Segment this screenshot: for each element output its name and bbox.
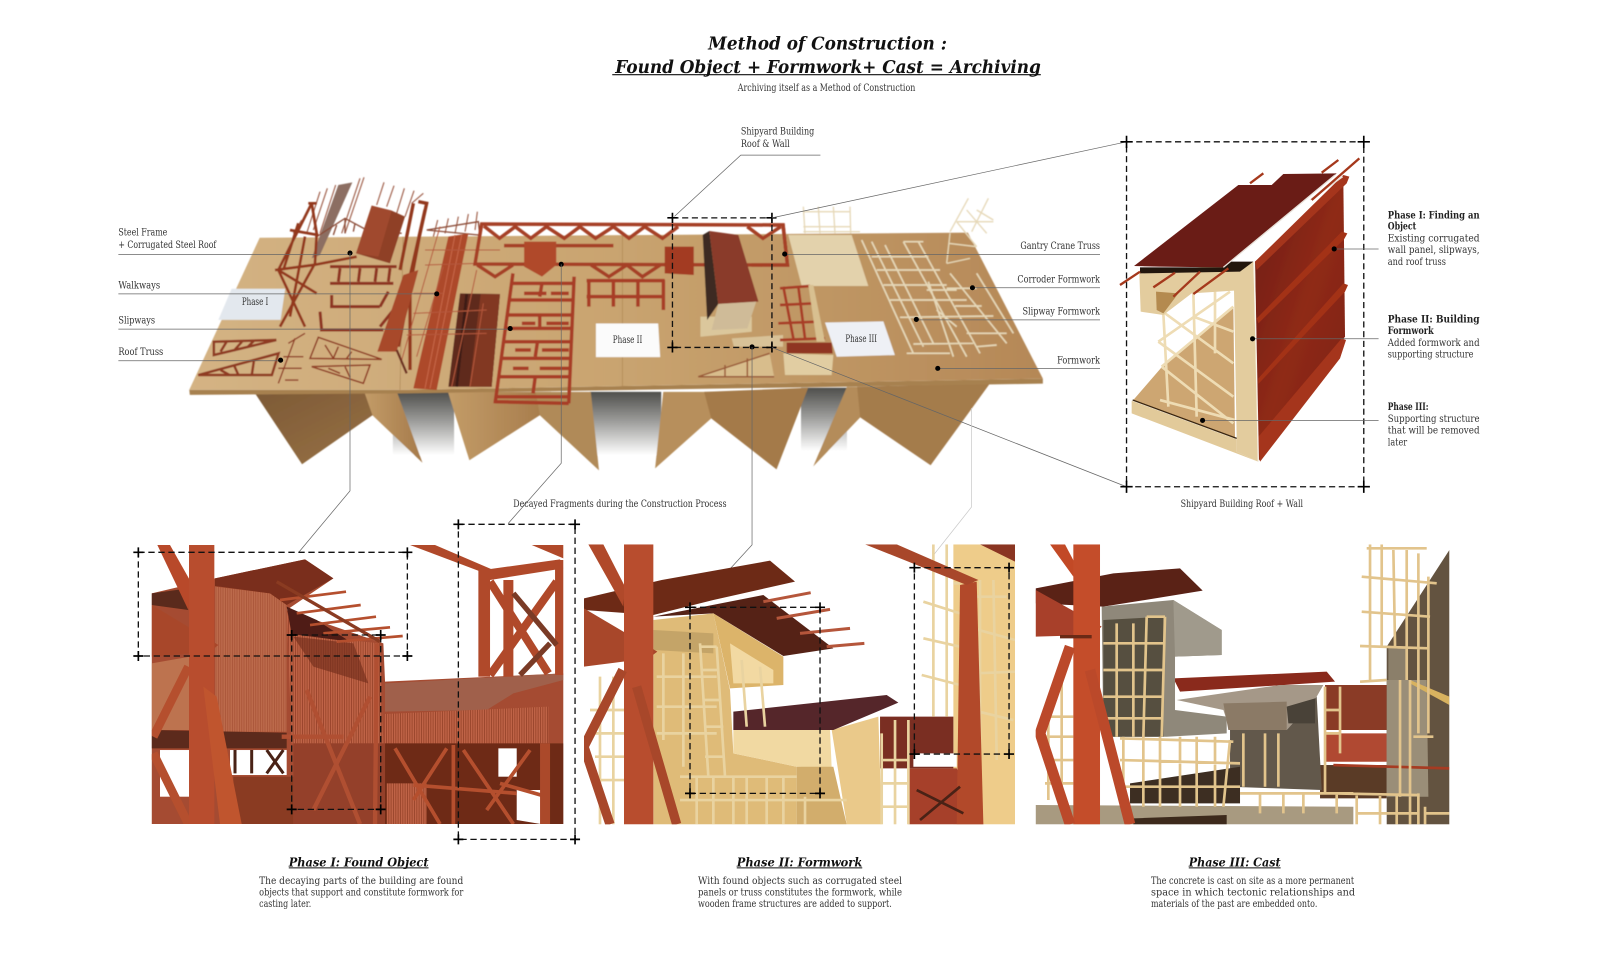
caption: shipyard building roof + wall: Shipyard Building Roof + Wall (1181, 499, 1303, 510)
table legs (254, 384, 990, 470)
gantry end (752, 225, 788, 265)
left roof truss (198, 340, 279, 375)
dashed marks over photo II (690, 568, 1009, 793)
dashed marks over photo I (138, 524, 575, 839)
label: corroder formwork (970, 275, 1101, 290)
phase card labels: Phase III (845, 334, 877, 345)
red roof panel (356, 206, 405, 263)
thin spikes (293, 177, 477, 237)
phase card labels: Phase II (613, 335, 642, 346)
slipway ladder (495, 273, 574, 403)
small left roof (152, 605, 218, 657)
pale base panel (788, 235, 868, 286)
timber lattice (1158, 292, 1235, 423)
caption: phase I: The decaying parts of the building are found (259, 876, 464, 887)
phase cards (218, 289, 895, 357)
caption: phase II: Phase II: Formwork (736, 855, 862, 869)
phase card labels: Phase I (242, 297, 268, 308)
grey corrugated roof panel (312, 182, 352, 258)
caption: phase I: casting later. (259, 899, 311, 910)
label: steel frame: Steel Frame (118, 228, 167, 239)
label: slipway formwork: Slipway Formwork (1022, 306, 1101, 317)
photo: phase III cast (1036, 544, 1449, 824)
annotation: phase I finding an object (1332, 210, 1480, 268)
caption: phase II: With found objects such as corrugated steel (698, 876, 902, 887)
caption: phase II: wooden frame structures are added to support. (698, 899, 892, 910)
caption: phase II: panels or truss constitutes the formwork, while (698, 887, 902, 898)
roofs (584, 561, 864, 656)
steel members (153, 582, 547, 824)
dashed frame around enlarged model (1120, 136, 1370, 493)
annotation: phase I finding an object: Object (1388, 222, 1417, 233)
annotation: phase III supporting structure (1200, 402, 1480, 448)
label: slipway formwork (914, 306, 1101, 322)
timber lattice (1045, 544, 1449, 824)
annotation: phase III supporting structure: Phase III: (1388, 402, 1429, 413)
label: shipyard building roof and wall: Shipyard Building (741, 127, 815, 138)
label: shipyard building roof and wall (674, 127, 820, 216)
photo: phase II formwork (584, 544, 1015, 824)
caption: phase III: materials of the past are embedded onto. (1151, 899, 1317, 910)
caption: phase III (1151, 855, 1356, 910)
caption: phase I (259, 855, 464, 910)
right side wall (880, 544, 1015, 824)
right red column and beam (865, 544, 1015, 824)
annotation: phase II building formwork: Formwork (1388, 326, 1435, 337)
caption: phase I: objects that support and constitute formwork for (259, 887, 463, 898)
label: formwork (935, 355, 1101, 371)
caption: phase III: The concrete is cast on site as a more permanent (1151, 876, 1354, 887)
callout labels, left (118, 228, 513, 363)
dashed detail frame on model (667, 213, 777, 353)
title (612, 34, 1041, 78)
timber interior (1133, 307, 1235, 438)
annotation: phase III supporting structure: later (1388, 437, 1407, 448)
cream formwork volumes (653, 613, 898, 824)
leader lines to detail photos (299, 253, 971, 569)
subtitle: Archiving itself as a Method of Construction (737, 83, 916, 94)
dark corrugated sheet (448, 293, 500, 387)
lattice tower (803, 207, 860, 233)
caption: phase III: space in which tectonic relationships and (1151, 887, 1356, 898)
right dark concrete (1387, 550, 1449, 824)
second walkway frame (587, 280, 665, 310)
red structures, table middle (198, 224, 787, 403)
annotation: phase II building formwork (1250, 314, 1480, 361)
main column and braces (157, 545, 242, 824)
long slipway bars (377, 270, 418, 352)
formwork and pale timber, table right (778, 198, 1013, 375)
table top (189, 233, 1043, 395)
annotation: phase I finding an object: and roof truss (1388, 257, 1446, 268)
label: corroder formwork: Corroder Formwork (1017, 275, 1101, 286)
label: shipyard building roof and wall: Roof & Wall (741, 139, 790, 150)
protruding red rods (1120, 158, 1359, 297)
title: Method of Construction : (707, 34, 947, 54)
timber lattice (590, 544, 1015, 824)
caption: phase III: Phase III: Cast (1188, 855, 1281, 869)
annotation: phase II building formwork: Added formwork and (1387, 338, 1480, 349)
label: roof truss: Roof Truss (118, 347, 163, 358)
right tower (398, 202, 427, 370)
caption: decayed fragments: Decayed Fragments during the Construction Process (513, 499, 727, 510)
thin cross bars (402, 227, 500, 387)
gantry crane truss (475, 224, 788, 277)
model: plywood table with structures (189, 177, 1043, 470)
cast base slab (1036, 805, 1353, 824)
annotation: phase I finding an object: wall panel, slipways, (1388, 245, 1480, 256)
floor shadows behind table legs (393, 388, 847, 455)
left frame (275, 203, 357, 327)
label: steel frame (118, 228, 353, 256)
label: roof truss (118, 347, 283, 363)
annotation: phase III supporting structure: Supporting structure (1388, 414, 1480, 425)
red steel frame (1036, 544, 1130, 824)
label: walkways: Walkways (118, 280, 160, 291)
roof trusses on table (310, 337, 382, 383)
annotation: phase I finding an object: Existing corrugated (1388, 233, 1480, 244)
corner crosses photo II (685, 563, 1014, 798)
label: formwork: Formwork (1057, 355, 1101, 366)
hex lattice at rear corner (947, 198, 993, 263)
concrete masses (1102, 600, 1323, 803)
shipyard building on table (698, 231, 783, 377)
formwork ladders (862, 240, 1013, 357)
callout labels, right (674, 127, 1101, 371)
enlarged model: shipyard building roof and wall (1120, 158, 1359, 462)
label: slipways: Slipways (118, 315, 155, 326)
annotation: phase II building formwork: Phase II: Building (1388, 314, 1480, 325)
label: slipways (118, 315, 513, 331)
right steel tower (410, 545, 563, 677)
annotation: phase III supporting structure: that will be removed (1388, 426, 1480, 437)
title: Found Object + Formwork+ Cast = Archiving (614, 58, 1041, 78)
small red lattice box (778, 285, 833, 375)
truss supporting roof (317, 218, 480, 237)
corrugated wall (1255, 175, 1349, 462)
photo: phase I found object (133, 519, 580, 844)
corner crosses photo I (133, 519, 580, 844)
roof panel (1134, 173, 1343, 273)
timber end wall and floor (1132, 262, 1258, 462)
label: walkways (118, 280, 439, 296)
caption: phase I: Phase I: Found Object (288, 855, 429, 869)
label: gantry crane truss (782, 241, 1100, 257)
corrugated walls and roofs (152, 559, 563, 824)
label: gantry crane truss: Gantry Crane Truss (1020, 241, 1100, 252)
annotation: phase I finding an object: Phase I: Finding an (1388, 210, 1480, 221)
label: steel frame: + Corrugated Steel Roof (118, 240, 217, 251)
leader lines to enlarged model (772, 142, 1127, 487)
walkway frames (320, 267, 397, 330)
caption: phase II (698, 855, 902, 910)
left steel frame (584, 544, 677, 824)
white background gaps (160, 748, 541, 824)
phase card labels (242, 297, 877, 346)
annotation: phase II building formwork: supporting structure (1388, 350, 1474, 361)
roof over cast (1036, 568, 1203, 607)
rear red elements (1173, 672, 1388, 798)
left steel frame cluster on table (275, 177, 500, 390)
